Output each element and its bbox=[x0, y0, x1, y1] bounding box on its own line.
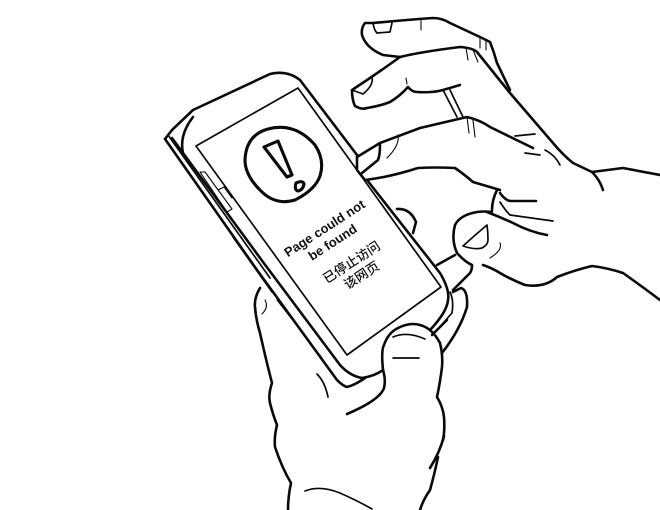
message text chinese: 该网页 bbox=[341, 258, 382, 292]
warning circle icon bbox=[245, 127, 322, 202]
side buttons bbox=[200, 172, 232, 212]
index knuckle lines bbox=[492, 190, 536, 210]
thumb of lower hand bbox=[382, 324, 444, 440]
palm lower edge bbox=[483, 265, 660, 300]
top finger bbox=[362, 23, 400, 57]
message text chinese: 已停止访问 bbox=[320, 238, 383, 286]
screen bbox=[196, 88, 441, 355]
second finger bbox=[352, 57, 460, 109]
index finger bbox=[357, 117, 533, 157]
lower hand holding the phone bbox=[255, 288, 467, 510]
wrist upper line bbox=[592, 168, 660, 175]
small bump behind phone bbox=[397, 209, 416, 233]
thumb bbox=[453, 212, 492, 290]
message text english: Page could not bbox=[281, 196, 368, 260]
gap strip between fingers bbox=[443, 90, 463, 117]
upper hand bbox=[352, 18, 660, 300]
phone body bbox=[165, 73, 453, 387]
message text english: be found bbox=[305, 221, 360, 263]
